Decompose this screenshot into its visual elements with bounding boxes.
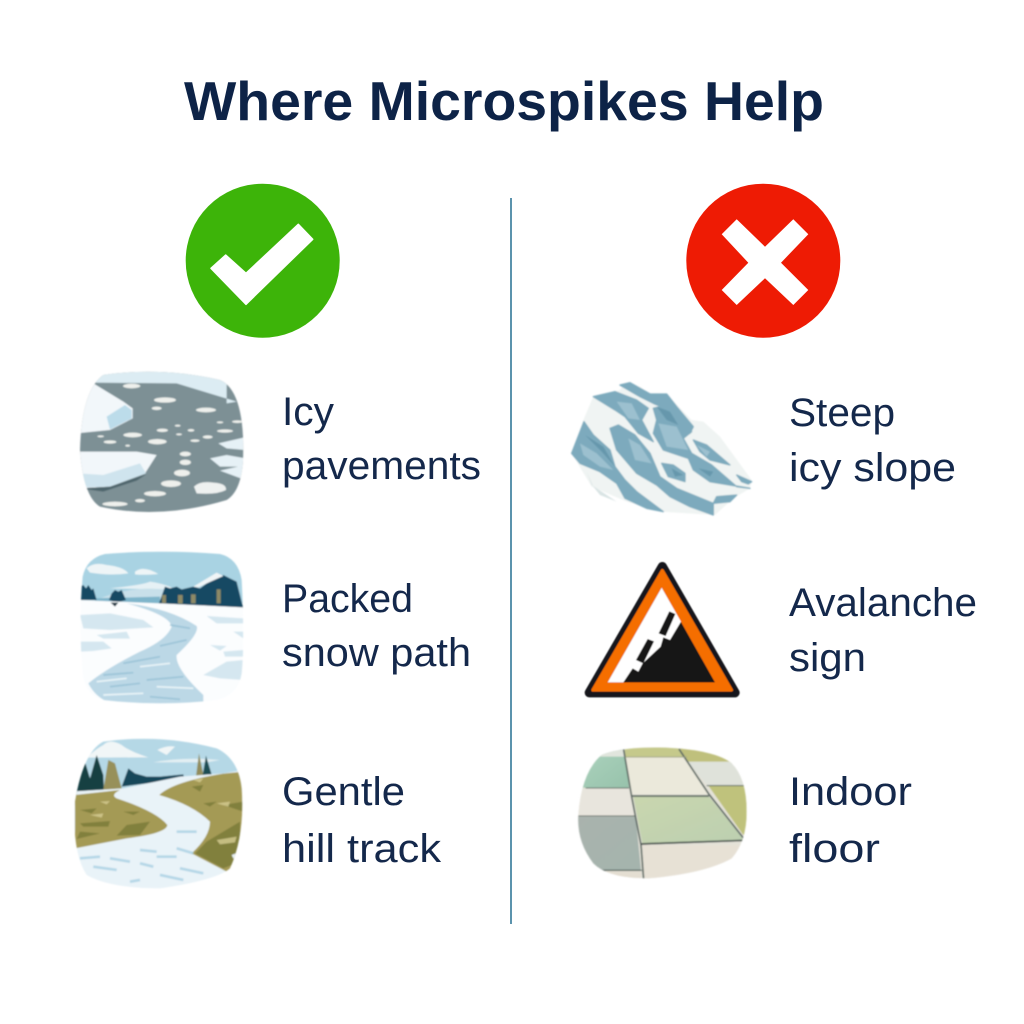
label: Steep icy slope: icy slope	[789, 446, 956, 490]
infographic canvas	[74, 80, 976, 924]
title: Where Microspikes Help	[184, 70, 824, 132]
label: Icy pavements	[282, 390, 481, 488]
image: packed snow path	[77, 547, 247, 707]
label: Packed snow path	[282, 577, 471, 675]
label: Gentle hill track: Gentle	[282, 770, 405, 814]
label: Steep icy slope: Steep	[789, 391, 895, 435]
label: Packed snow path: snow path	[282, 631, 471, 675]
label: Indoor floor: floor	[789, 827, 880, 871]
label: Gentle hill track	[282, 770, 442, 871]
image: gentle hill track	[74, 738, 244, 888]
label: Avalanche sign: sign	[789, 636, 866, 680]
image: steep icy slope	[572, 383, 752, 515]
panel: where microspikes do not help	[572, 383, 977, 882]
icon: avalanche warning sign	[589, 567, 735, 693]
label: Avalanche sign: Avalanche	[789, 581, 977, 625]
icon: red cross	[686, 184, 840, 338]
label: Packed snow path: Packed	[282, 577, 413, 621]
panel: where microspikes help	[70, 365, 481, 895]
label: Steep icy slope	[789, 391, 956, 490]
label: Icy pavements: Icy	[282, 390, 334, 434]
label: Indoor floor	[789, 770, 912, 871]
image: indoor floor tiles	[575, 745, 752, 882]
icon: green check	[186, 184, 340, 338]
label: Icy pavements: pavements	[282, 444, 481, 488]
label: Indoor floor: Indoor	[789, 770, 912, 814]
image: icy pavement	[77, 365, 247, 517]
label: Avalanche sign	[789, 581, 977, 680]
label: Gentle hill track: hill track	[282, 827, 442, 871]
